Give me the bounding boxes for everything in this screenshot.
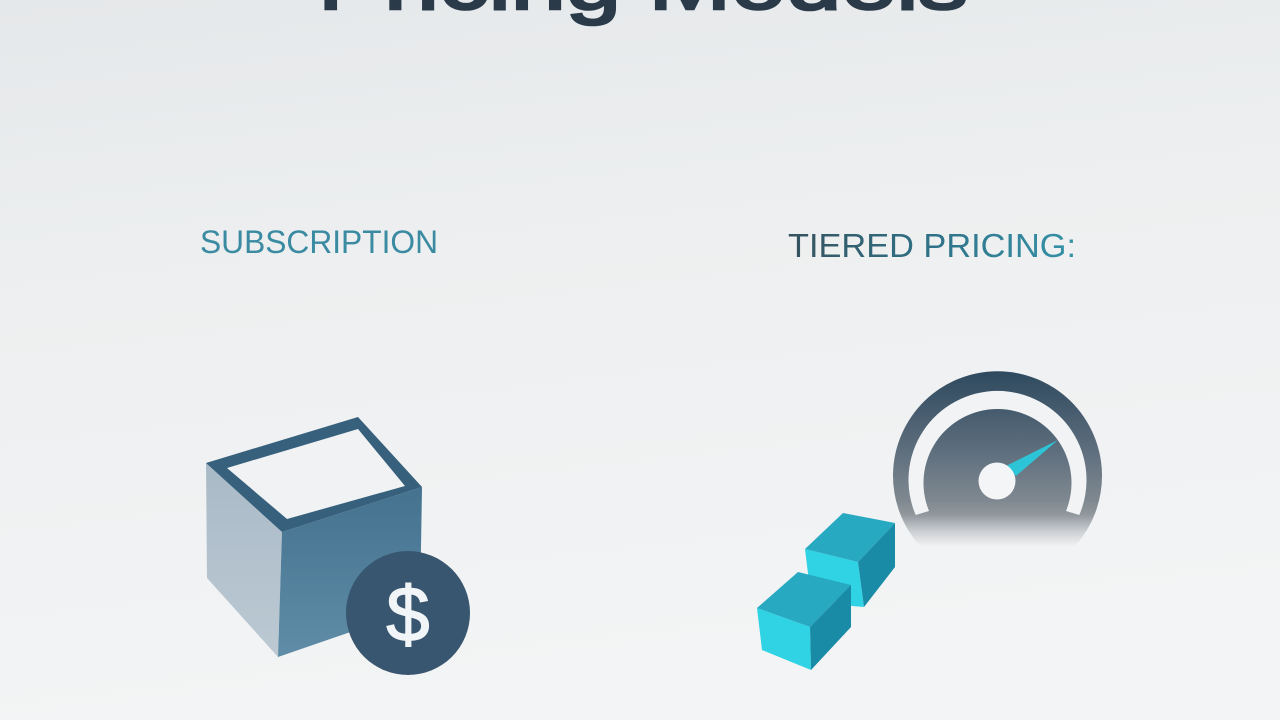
icon: stacked cubes: [757, 513, 895, 670]
icon: speedometer gauge: [893, 371, 1102, 547]
box opening: [227, 429, 405, 519]
gauge hub: [978, 462, 1016, 500]
box rim: [206, 417, 422, 532]
box left face: [206, 463, 282, 657]
gauge white arc: [909, 391, 1087, 515]
dollar coin: [346, 551, 470, 675]
icon: subscription box with dollar coin: [206, 417, 470, 675]
heading: subscription: SUBSCRIPTION: [200, 224, 438, 260]
gauge needle: [1006, 440, 1058, 476]
front cube: [757, 572, 851, 670]
box front face: [278, 487, 422, 657]
heading: tiered pricing: TIERED PRICING:: [788, 227, 1076, 264]
dollar coin: $: [386, 570, 430, 658]
gauge dial: [893, 371, 1102, 547]
back cube: [805, 513, 895, 607]
